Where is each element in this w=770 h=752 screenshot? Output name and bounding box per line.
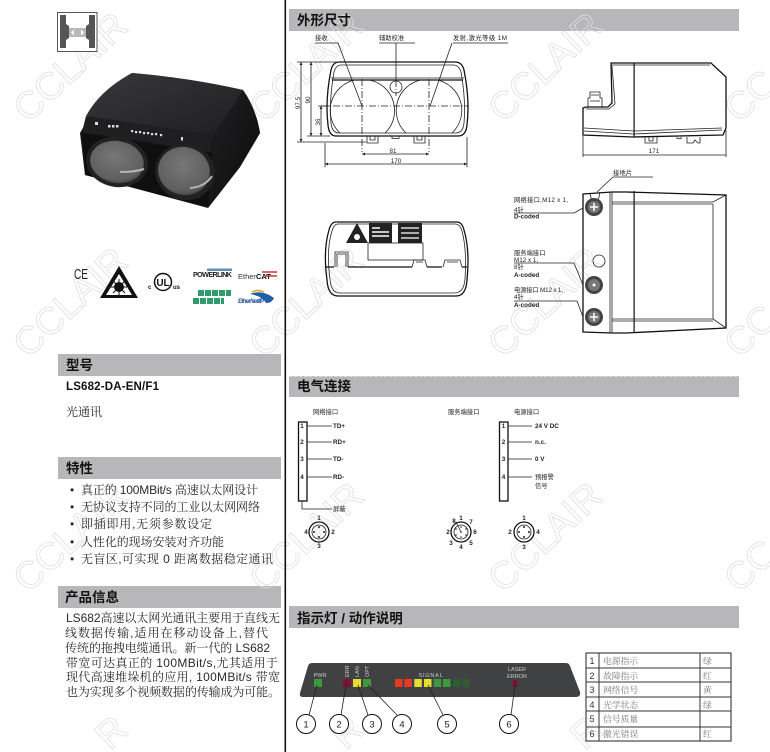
heading: product info: 产品信息 [65,589,119,605]
feature list: • [70,483,74,497]
drawing: bottom view with connectors: A-coded [514,302,539,309]
heading: service port: 服务端接口 [448,407,479,416]
logo: POWERLINK: POWERLINK [193,270,233,279]
connector pinout: power port: 3 [522,544,526,551]
watermark: CCLAIR [241,475,372,601]
connector pinout: service port: 7 [469,519,473,526]
drawing: bottom view with connectors: A-coded [514,272,539,279]
product info paragraph: 带宽可达真正的 100MBit/s,尤其适用于 [66,655,278,670]
indicator panel: ERROR [507,674,527,680]
wiring diagram: network port: 1 [300,423,304,430]
indicator callouts [296,685,518,734]
drawing: bottom view with connectors: 网络接口,M12 x 1, [514,195,568,204]
feature list: 人性化的现场安装对齐功能 [81,534,224,549]
model number: LS682-DA-EN/F1 [66,381,160,393]
drawing: front view with dimensions: 97.5 [295,96,302,109]
indicator table: 2 [589,671,595,681]
indicator table: 网络信号 [603,684,638,695]
watermark: CCLAIR [5,5,136,131]
wiring diagram: power port: 0 V [535,456,545,463]
wiring diagram: power port: 信号 [535,481,548,490]
connector pinout: power port: 1 [522,515,526,522]
indicator callouts: 5 [444,720,450,730]
drawing: side view with dimension: 171 [649,148,660,155]
indicator table: 信号质量 [603,713,638,724]
product info paragraph: 线数据传输,适用在移动设备上,替代 [65,625,268,640]
indicator table: 绿 [703,700,712,710]
wiring diagram: network port: RD- [333,474,344,481]
wiring diagram: network port [298,407,346,513]
logo: cULus [148,274,181,291]
watermark: CCLAIR [480,240,611,366]
indicator table: 故障指示 [603,670,638,681]
header band: features [58,457,281,479]
heading: electrical connection: 电气连接 [297,378,351,394]
drawing: rear view with labels [325,222,468,296]
drawing: bottom view with connectors: 4针 [514,292,524,301]
indicator panel: ERR [345,665,351,677]
product info paragraph: LS682高速以太网光通讯主要用于直线无 [66,610,280,625]
drawing: front view with dimensions: 发射,激光等级 1M [453,33,507,42]
wiring diagram: network port: TD- [333,456,344,463]
drawing: front view with dimensions: 辅助校准 [379,33,404,42]
wiring diagram: power port: n.c. [535,439,546,446]
connector pinout: service port: 3 [449,540,453,547]
indicator table [586,653,731,741]
logo: EtherCAT: EtherCAT [238,272,271,281]
connector pinout: network port: 3 [317,543,321,550]
wiring diagram: network port: 网络接口 [313,407,338,416]
feature list: 即插即用,无须参数设定 [81,516,212,531]
feature list: 无盲区,可实现 0 距离数据稳定通讯 [81,551,273,566]
indicator callouts: 1 [303,720,309,730]
drawing: front view with dimensions [295,33,508,167]
indicator table: 光学状态 [603,699,638,710]
icon: light-barrier symbol [58,12,97,52]
watermark: CCLAIR [5,475,136,601]
connector pinout: network port: 4 [304,529,308,536]
connector pinout: service port: 2 [446,529,450,536]
wiring diagram: network port: RD+ [333,439,346,446]
product info paragraph: 传统的拖拽电缆通讯。新一代的 LS682 [65,640,270,655]
indicator table: 5 [589,714,595,724]
header band: product info [58,586,281,608]
drawing: front view with dimensions: 36 [315,118,322,126]
connector pinout: network port: 2 [331,529,335,536]
feature list: • [70,517,74,531]
heading: model: 型号 [66,358,93,373]
drawing: bottom view with connectors: 8针 [514,262,524,271]
wiring diagram: network port: 3 [300,456,304,463]
product info paragraph: 也为实现多个视频数据的传输成为可能。 [66,684,280,699]
logo: cULus: UL [156,278,170,289]
indicator table: 红 [703,670,712,681]
indicator table: 绿 [703,656,712,666]
indicator callouts: 4 [399,720,405,730]
drawing: bottom view with connectors [514,168,726,333]
indicator table: 1 [589,656,595,666]
connector pinout: power port [508,515,540,551]
logo: EtherNet/IP [238,290,274,305]
vertical divider [284,0,286,752]
connector pinout: network port: 1 [317,515,321,522]
connector pinout: service port: 4 [459,544,463,551]
drawing: front view with dimensions: 90 [305,96,312,104]
connector pinout: service port: 5 [469,540,473,547]
logo: CE mark: CE [74,266,88,283]
drawing: bottom view with connectors: M12 x 1, [514,257,538,264]
logo: cULus: c [148,285,152,291]
indicator panel: PWR [314,673,326,679]
indicator table: 红 [703,728,712,739]
indicator callouts: 3 [369,720,375,730]
drawing: side view with dimension [583,63,726,157]
connector pinout: service port: 8 [452,518,456,525]
wiring diagram: network port: 4 [300,474,304,481]
logo: EtherNet/IP: EtherNet/IP [238,299,265,305]
watermark: CCLAIR [241,5,372,131]
drawing: bottom view with connectors: 4针 [514,205,524,214]
header band: dimensions [289,9,739,31]
model description: 光通讯 [66,404,102,419]
wiring diagram: network port: TD+ [333,423,345,430]
feature list: 真正的 100MBit/s 高速以太网设计 [81,482,258,497]
product info paragraph [65,610,280,699]
indicator table: 4 [589,700,595,710]
watermark: CCLAIR [5,240,136,366]
connector pinout: network port [304,515,335,550]
connector pinout: service port: 1 [459,515,463,522]
heading: dimensions: 外形尺寸 [297,12,351,28]
wiring diagram: power port: 2 [502,439,506,446]
feature list: • [70,535,74,549]
wiring diagram: power port: 3 [502,456,506,463]
feature list: • [70,500,74,514]
wiring diagram: power port [500,407,559,501]
indicator table: 6 [589,729,595,739]
drawing: bottom view with connectors: D-coded [514,214,539,220]
wiring diagram: power port: 预报警 [535,472,555,481]
indicator callouts: 6 [506,720,512,730]
wiring diagram: network port: 2 [300,439,304,446]
connector pinout: power port: 4 [536,529,540,536]
indicator panel: SIGNAL [419,673,443,679]
watermark: CCLAIR [480,475,611,601]
watermark: CCLAIR [480,5,611,131]
feature list: 无协议支持不同的工业以太网网络 [81,499,260,514]
feature list: • [70,552,74,566]
heading: indicators and operation: 指示灯 / 动作说明 [297,610,403,626]
product photo: optical data transceiver [80,73,260,208]
indicator panel [300,663,580,697]
icon: laser warning triangle [100,266,138,298]
indicator callouts: 2 [336,720,342,730]
indicator panel: LASER [508,667,526,673]
wiring diagram: power port: 4 [502,474,506,481]
logo: PROFINET [193,290,231,304]
indicator panel: OPT [365,665,371,677]
indicator table: 3 [589,685,595,695]
indicator table: 黄 [703,684,713,695]
drawing: front view with dimensions: 接收 [315,33,328,42]
feature list [70,482,273,566]
drawing: front view with dimensions: 170 [391,158,402,165]
connector pinout: service port: 6 [473,529,477,536]
connector pinout: service port [446,515,477,551]
drawing: bottom view with connectors: 电源接口 M12 x 1, [514,285,563,294]
header band: electrical connection [289,376,739,397]
connector pinout: power port: 2 [508,529,512,536]
logo: cULus: us [173,285,181,291]
product info paragraph: 现代高速堆垛机的应用, 100MBit/s 带宽 [66,669,280,684]
wiring diagram: power port: 24 V DC [535,423,559,430]
header band: indicators [289,606,739,628]
header band: model [58,354,281,376]
wiring diagram: power port: 电源接口 [514,407,539,416]
wiring diagram: power port: 1 [502,423,506,430]
drawing: bottom view with connectors: 服务端接口 [514,248,545,257]
drawing: bottom view with connectors: 接地片 [613,168,632,177]
watermark: CCLAIR [241,240,372,366]
wiring diagram: network port: 屏蔽 [333,504,346,513]
indicator table: 激光错误 [603,728,638,739]
indicator table: 电源指示 [603,655,638,666]
indicator panel: LAN [355,666,361,677]
heading: features: 特性 [66,460,93,476]
drawing: front view with dimensions: 81 [389,148,397,155]
